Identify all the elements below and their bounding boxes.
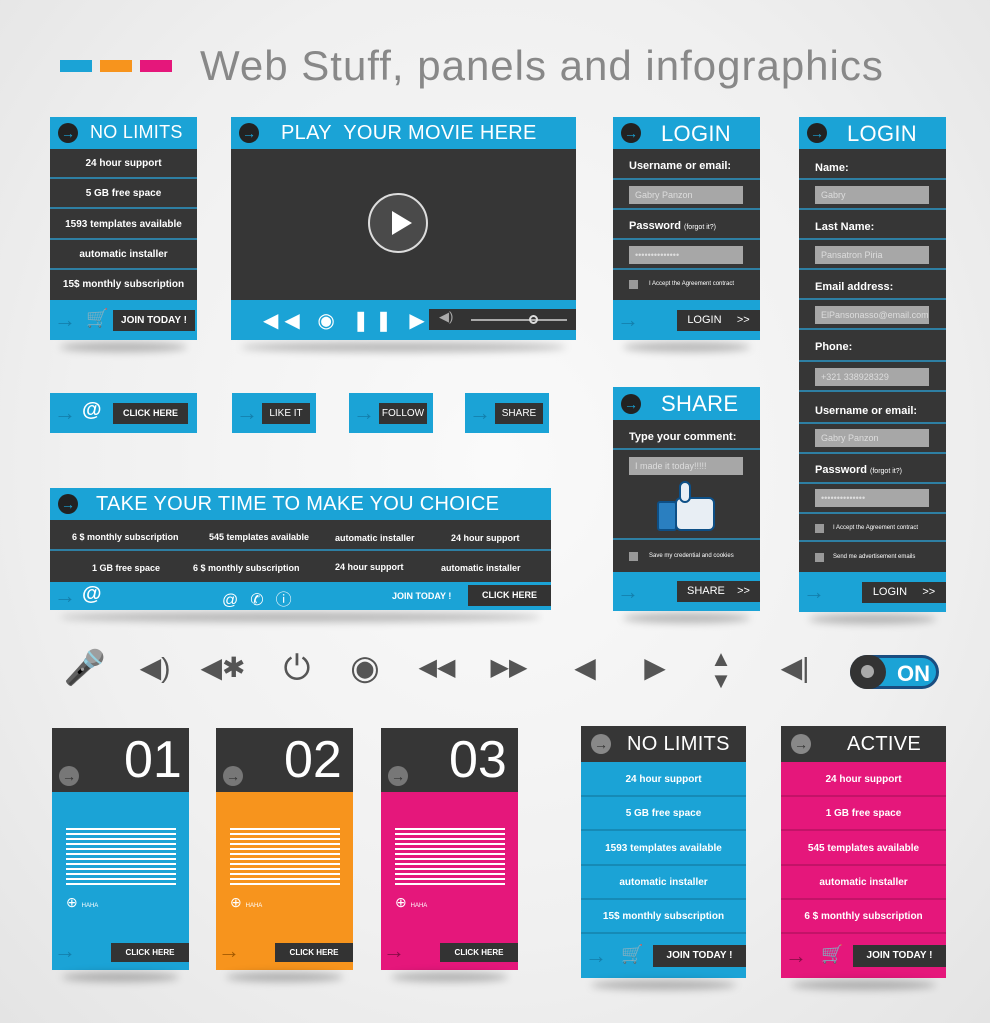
button: click here: → [54,400,76,425]
panel: login small: Gabry Panzon [635,190,693,200]
card 02: → [226,768,240,784]
panel: login tall: LOGIN >> [873,586,935,598]
panel: login small: Username or email: [629,160,731,172]
icon: mute: ◀✱ [200,652,246,683]
panel: take your time: → [54,583,76,608]
panel: active pink: ACTIVE [847,733,921,755]
button: click here: @ [82,399,102,421]
card 03 [381,728,518,970]
panel: take your time: @✆ⓘ [222,592,304,609]
panel: login tall: → [810,125,824,141]
panel: no limits top: 15$ monthly subscription [63,279,184,290]
button: follow: → [353,400,375,425]
panel: active pink: → [794,736,808,752]
button: click here [50,393,197,433]
panel: login tall: +321 338928329 [821,372,889,382]
panel: login small: •••••••••••••• [635,250,679,260]
panel: movie player [231,117,576,340]
card 02: 02 [284,731,342,789]
panel: no limits top: 24 hour support [85,158,162,169]
panel: take your time: JOIN TODAY ! [392,591,451,601]
panel: login tall: Name: [815,162,849,174]
panel: login tall: → [803,579,825,604]
card 03: → [391,768,405,784]
panel: login small [613,117,760,340]
card 02 [216,728,353,970]
panel: no limits blue: NO LIMITS [627,733,730,755]
panel: no limits top [50,117,197,340]
panel: take your time: → [61,496,75,512]
icon: back: ◀| [781,652,809,683]
panel: login tall: LOGIN [847,121,917,146]
panel: take your time: 6 $ monthly subscription [193,563,300,573]
panel: login tall: Phone: [815,341,852,353]
panel: login tall: Password (forgot it?) [815,464,902,476]
icon: microphone: 🎤 [64,649,106,687]
panel: active pink: → [785,943,807,968]
panel: no limits blue: → [585,943,607,968]
panel: login small: Password (forgot it?) [629,220,716,232]
panel: login tall: Send me advertisement emails [833,554,915,560]
button: like it: LIKE IT [269,408,303,419]
card 01: CLICK HERE [126,948,174,957]
panel: take your time: @ [82,583,102,605]
panel: active pink: 24 hour support [825,774,902,785]
panel: no limits blue: 5 GB free space [626,808,701,819]
controls: ◀) [439,309,453,324]
panel: active pink: 545 templates available [808,843,919,854]
panel: active pink: automatic installer [819,877,908,888]
panel: login tall [799,117,946,612]
panel: active pink: 1 GB free space [826,808,901,819]
panel: no limits blue: 15$ monthly subscription [603,911,724,922]
panel: no limits top: 5 GB free space [86,188,161,199]
card 01: ⊕ HAHA [66,894,98,910]
panel: movie player: → [242,125,256,141]
icon: up down [710,646,732,693]
panel: login tall: Gabry [821,190,846,200]
controls: ◀◀ ◉ ❚❚ ▶ ▶▶ [263,310,485,332]
panel: login tall: •••••••••••••• [821,493,865,503]
panel: take your time: automatic installer [441,563,521,573]
panel: no limits blue: automatic installer [619,877,708,888]
panel: take your time: TAKE YOUR TIME TO MAKE YOU CHOICE [96,493,499,515]
panel: login tall: ElPansonasso@email.com [821,310,929,320]
panel: login tall: Username or email: [815,405,917,417]
icon: record: ◉ [350,649,380,687]
icon: rewind: ◀◀ [419,654,455,681]
panel: login tall: Gabry Panzon [821,433,879,443]
panel: no limits blue: JOIN TODAY ! [667,950,732,961]
icon: toggle on [850,655,939,689]
panel: share [613,387,760,611]
panel: share: → [617,579,639,604]
panel: share: SHARE [661,391,738,416]
title: Web Stuff, panels and infographics [200,42,884,89]
card 01: → [54,938,76,963]
button: follow [349,393,433,433]
panel: take your time [50,488,551,610]
panel: no limits top: 🛒 [86,308,108,328]
panel: share: → [624,396,638,412]
panel: login small: → [624,125,638,141]
button: share: SHARE [502,408,536,419]
panel: take your time: 545 templates available [209,532,309,542]
card 03: → [383,938,405,963]
panel: active pink: JOIN TODAY ! [867,950,932,961]
card 02: CLICK HERE [290,948,338,957]
panel: take your time: 24 hour support [335,562,404,572]
icon: thumbs up [657,481,715,531]
panel: active pink: 6 $ monthly subscription [804,911,923,922]
card 01 [52,728,189,970]
panel: login tall: Email address: [815,281,893,293]
icon: power: ⏻ [284,649,310,687]
button: like it: → [236,400,258,425]
controls [231,300,576,340]
icon: right: ▶ [644,652,666,683]
panel: active pink [781,726,946,978]
panel: share: I made it today!!!!! [635,461,707,471]
icon: toggle on: ON [897,661,930,686]
card 03: ⊕ HAHA [395,894,427,910]
panel: share: Type your comment: [629,431,736,443]
card 02: ⊕ HAHA [230,894,262,910]
panel: no limits top: NO LIMITS [90,122,183,142]
panel: login tall: Last Name: [815,221,874,233]
panel: no limits blue: 24 hour support [625,774,702,785]
icon: up down: ▲ [710,646,732,671]
panel: active pink: 🛒 [821,944,843,964]
icon: forward: ▶▶ [491,654,527,681]
icons row [64,646,939,693]
panel: no limits top: 1593 templates available [65,219,182,230]
panel: take your time: 24 hour support [451,533,520,543]
panel: no limits top: → [61,125,75,141]
card 03: 03 [449,731,507,789]
panel: take your time: 1 GB free space [92,563,160,573]
card 01: 01 [124,731,182,789]
panel: login tall: Pansatron Piria [821,250,883,260]
card 02: → [218,938,240,963]
card 03: CLICK HERE [455,948,503,957]
panel: no limits top: JOIN TODAY ! [121,315,187,326]
panel: no limits blue: 🛒 [621,944,643,964]
panel: login small: → [617,307,639,332]
button: follow: FOLLOW [382,408,424,419]
panel: login small: LOGIN >> [687,314,750,326]
panel: no limits top: → [54,307,76,332]
panel: no limits blue: → [594,736,608,752]
icon: play [368,193,428,253]
panel: share: SHARE >> [687,585,750,597]
icon: left: ◀ [574,652,596,683]
panel: take your time: automatic installer [335,533,415,543]
panel: no limits blue: 1593 templates available [605,843,722,854]
panel: login small: I Accept the Agreement contract [649,281,734,287]
panel: share: Save my credential and cookies [649,553,734,559]
panel: movie player: PLAY YOUR MOVIE HERE [281,122,537,144]
button: click here: CLICK HERE [123,408,178,418]
card 01: → [62,768,76,784]
panel: login small: LOGIN [661,121,731,146]
color bars [60,60,172,72]
button: share: → [469,400,491,425]
icon: speaker: ◀) [140,652,170,683]
panel: take your time: 6 $ monthly subscription [72,532,179,542]
icon: up down: ▼ [710,668,732,693]
button: like it [232,393,316,433]
panel: take your time: CLICK HERE [482,590,537,600]
panel: no limits blue [581,726,746,978]
panel: no limits top: automatic installer [79,249,168,260]
panel: login tall: I Accept the Agreement contract [833,525,918,531]
button: share [465,393,549,433]
